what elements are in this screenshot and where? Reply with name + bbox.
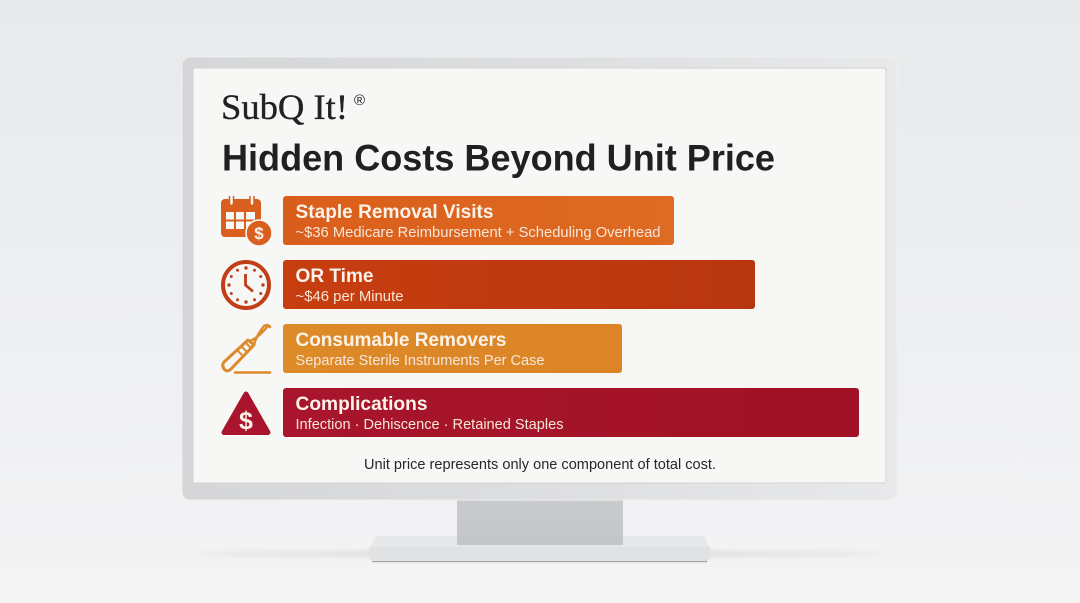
bar: OR time xyxy=(283,260,755,309)
title: Hidden Costs Beyond Unit Price xyxy=(222,138,775,178)
footer note: Unit price represents only one component of total cost. xyxy=(364,457,716,473)
floor shadow xyxy=(195,552,885,556)
row: OR time xyxy=(223,260,755,309)
icon: calendar with dollar: $ xyxy=(254,224,264,243)
row: consumable removers xyxy=(223,324,622,373)
bar: consumable removers: Separate Sterile Instruments Per Case xyxy=(296,353,544,369)
bar: complications: Complications xyxy=(296,394,428,415)
icon: staple remover xyxy=(223,325,270,372)
bar: complications xyxy=(283,388,859,437)
icon: warning triangle with dollar xyxy=(224,394,268,435)
bar: OR time: OR Time xyxy=(296,266,374,287)
bar: consumable removers: Consumable Removers xyxy=(296,330,506,351)
bar: consumable removers xyxy=(283,324,622,373)
bar: complications: Infection · Dehiscence · Retained Staples xyxy=(296,417,564,433)
row: complications xyxy=(224,388,859,437)
icon: calendar with dollar xyxy=(221,196,272,246)
bar: staple removal: Staple Removal Visits xyxy=(296,202,494,223)
row: staple removal visits xyxy=(221,196,674,246)
icon: clock xyxy=(223,262,269,308)
screen xyxy=(193,68,886,483)
icon: warning triangle with dollar: $ xyxy=(239,407,253,435)
monitor frame xyxy=(182,57,897,500)
registered mark: ® xyxy=(354,92,365,109)
logo: SubQ It! xyxy=(221,87,348,127)
bar: staple removal xyxy=(283,196,674,245)
monitor xyxy=(182,57,897,562)
bar: OR time: ~$46 per Minute xyxy=(296,289,404,305)
monitor stand xyxy=(369,500,710,562)
bar: staple removal: ~$36 Medicare Reimbursement + Scheduling Overhead xyxy=(296,225,660,241)
